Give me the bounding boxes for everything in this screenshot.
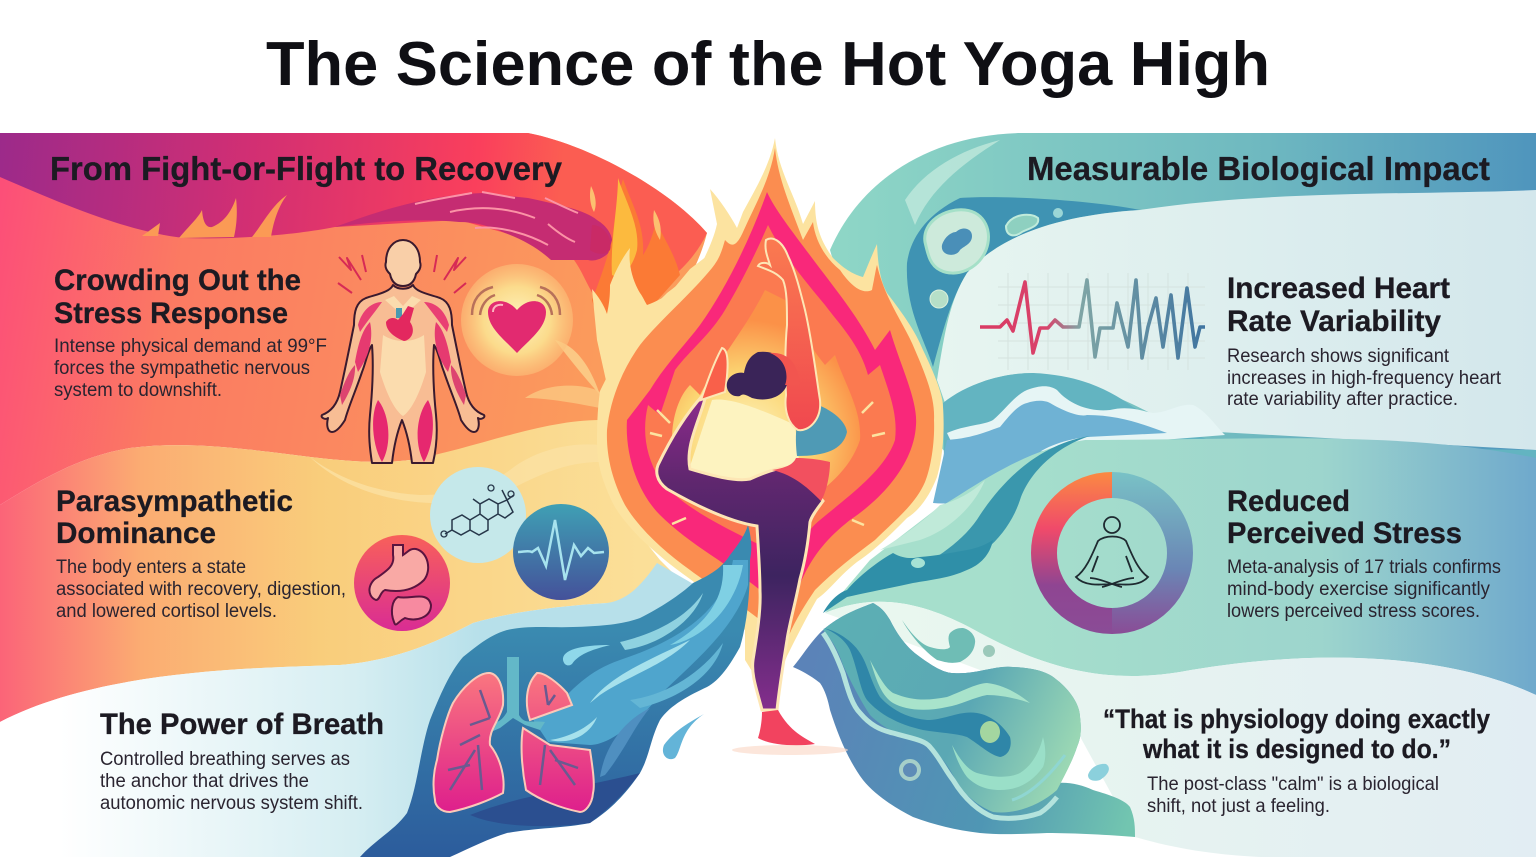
text block: parasympathetic dominance: and lowered cortisol levels. xyxy=(56,601,277,622)
text block: parasympathetic dominance xyxy=(56,485,346,622)
abdomen xyxy=(772,458,830,501)
callout: physiology quote: shift, not just a feeling. xyxy=(1147,796,1330,817)
torso xyxy=(796,400,847,456)
text block: crowding out the stress response: Stress Response xyxy=(54,297,288,330)
chart: stress reduction ring with meditating figure xyxy=(1044,485,1180,621)
text block: parasympathetic dominance: The body enters a state xyxy=(56,557,246,578)
text block: crowding out the stress response: forces the sympathetic nervous xyxy=(54,358,310,379)
wave: lower right flow xyxy=(793,603,1135,837)
text block: crowding out the stress response xyxy=(54,264,327,401)
text block: increased heart rate variability: Rate Variability xyxy=(1227,305,1441,338)
panel: from fight-or-flight to recovery xyxy=(0,133,707,857)
heading: from fight-or-flight to recovery: From Fight-or-Flight to Recovery xyxy=(50,150,563,187)
text block: parasympathetic dominance: Dominance xyxy=(56,517,216,550)
text block: reduced perceived stress: mind-body exercise significantly xyxy=(1227,579,1490,600)
text block: crowding out the stress response: Intense physical demand at 99°F xyxy=(54,336,327,357)
text block: the power of breath: The Power of Breath xyxy=(100,708,384,741)
head xyxy=(727,352,788,399)
hair band face xyxy=(770,353,800,385)
icon: human body with muscles and heart xyxy=(322,240,484,463)
text block: parasympathetic dominance: associated with recovery, digestion, xyxy=(56,579,346,600)
standing foot xyxy=(758,710,815,745)
chart: heart rate variability trace xyxy=(980,273,1205,370)
heading: measurable biological impact: Measurable Biological Impact xyxy=(1027,150,1490,187)
icon: water droplet xyxy=(663,714,704,759)
text block: reduced perceived stress: lowers perceived stress scores. xyxy=(1227,601,1480,622)
text block: the power of breath: autonomic nervous system shift. xyxy=(100,793,363,814)
decorative cell group xyxy=(925,208,1063,308)
panel: measurable biological impact xyxy=(793,133,1536,857)
text block: parasympathetic dominance: Parasympathetic xyxy=(56,485,293,518)
text block: increased heart rate variability: increases in high-frequency heart xyxy=(1227,368,1502,389)
yoga figure: dancer pose xyxy=(657,239,847,745)
title: The Science of the Hot Yoga High xyxy=(266,30,1270,99)
central flame xyxy=(597,138,944,700)
raised arm xyxy=(758,239,820,430)
standing leg and raised leg xyxy=(657,395,823,710)
icon: pulse wave circle xyxy=(513,504,609,600)
text block: reduced perceived stress xyxy=(1227,485,1501,622)
callout: physiology quote: what it is designed to do.” xyxy=(1142,734,1451,764)
text block: crowding out the stress response: Crowding Out the xyxy=(54,264,301,297)
text block: the power of breath xyxy=(100,708,384,814)
text block: the power of breath: Controlled breathing serves as xyxy=(100,749,350,770)
callout: physiology quote: The post-class "calm" is a biological xyxy=(1147,774,1439,795)
text block: increased heart rate variability: rate variability after practice. xyxy=(1227,389,1458,410)
pale lower wave xyxy=(825,602,1536,857)
callout: physiology quote: “That is physiology doing exactly xyxy=(1103,704,1490,734)
icon: band flames and muscle stripes xyxy=(142,178,707,385)
icon: stomach circle xyxy=(354,535,450,631)
text block: reduced perceived stress: Meta-analysis of 17 trials confirms xyxy=(1227,557,1501,578)
text block: the power of breath: the anchor that drives the xyxy=(100,771,309,792)
floor shadow xyxy=(732,745,848,755)
callout: physiology quote xyxy=(1103,704,1490,817)
text block: reduced perceived stress: Reduced xyxy=(1227,485,1350,518)
icon: lungs with water flow xyxy=(360,525,751,857)
text block: increased heart rate variability: Increased Heart xyxy=(1227,272,1450,305)
foot of raised leg xyxy=(701,348,728,400)
icon: glowing heart xyxy=(461,264,573,376)
text block: increased heart rate variability xyxy=(1227,272,1502,410)
icon: cortisol molecule xyxy=(430,467,526,563)
text block: reduced perceived stress: Perceived Stress xyxy=(1227,517,1462,550)
text block: crowding out the stress response: system to downshift. xyxy=(54,380,222,401)
text block: increased heart rate variability: Research shows significant xyxy=(1227,346,1450,367)
